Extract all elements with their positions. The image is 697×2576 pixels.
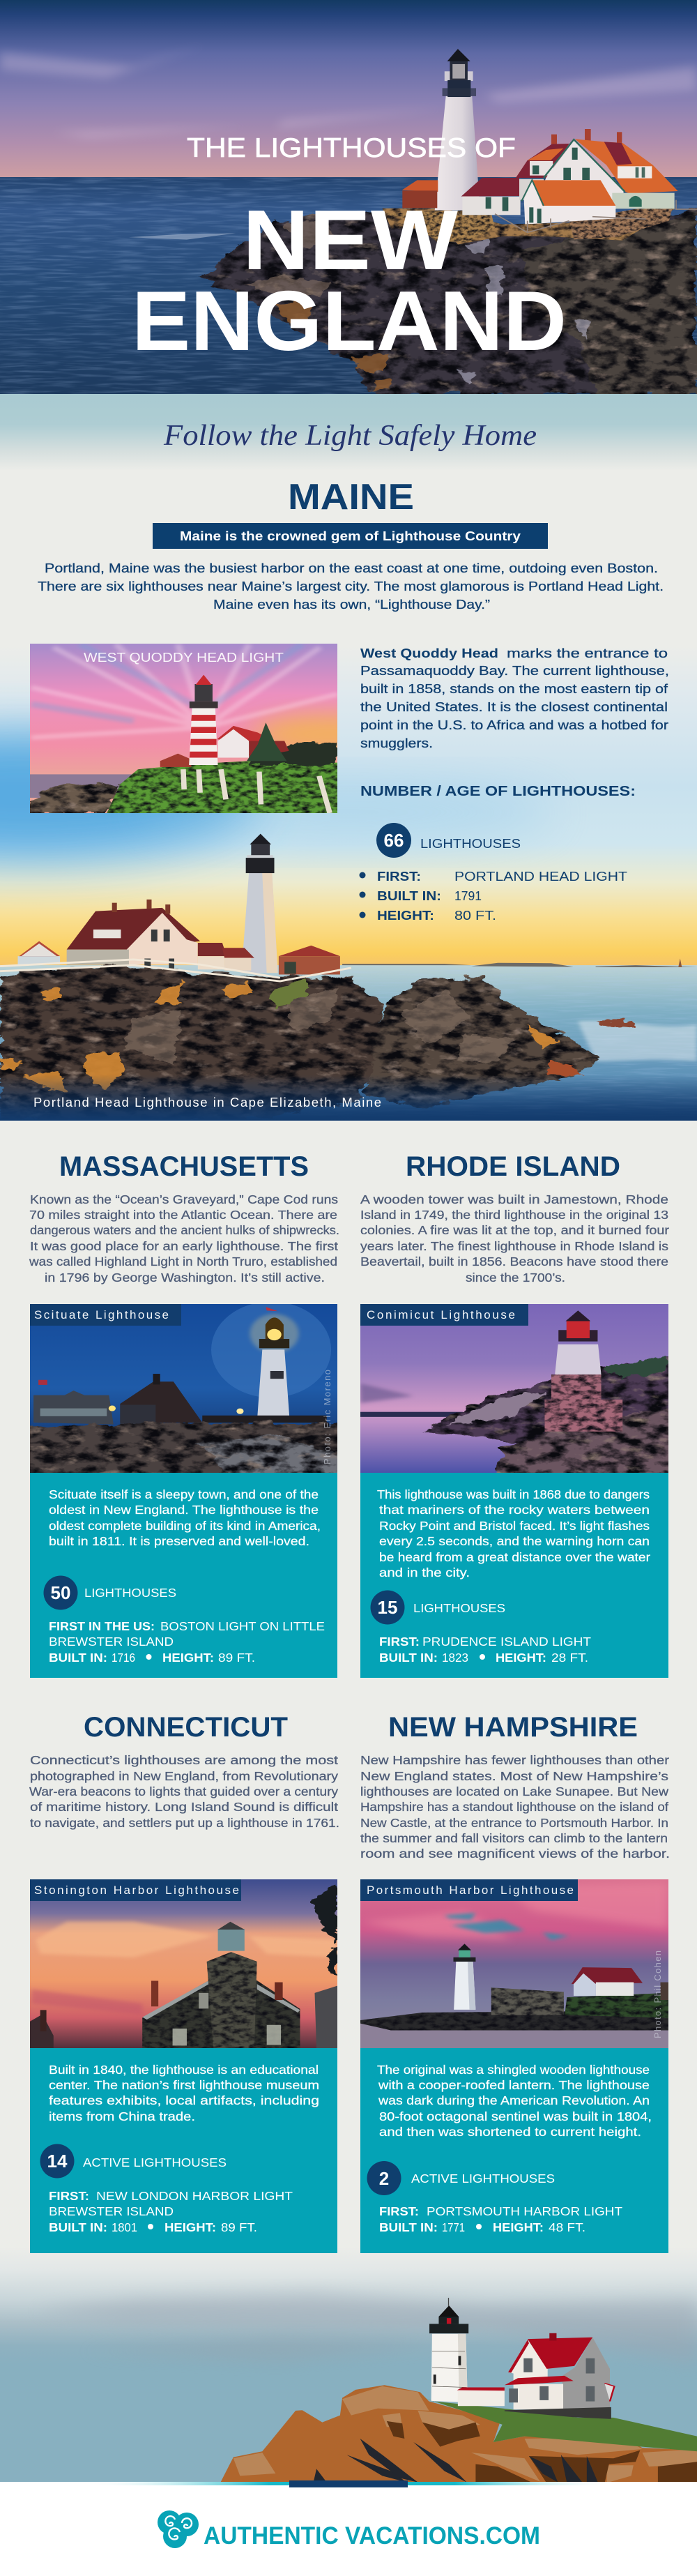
label: Portsmouth	[360, 1879, 578, 1901]
Massachusetts paragraph: It was good place for an early lighthouse. The first	[30, 1239, 338, 1253]
Conimicut facts: BUILT IN:	[379, 1651, 438, 1665]
Portsmouth facts: BUILT IN:	[379, 2220, 438, 2234]
Scituate text: Scituate itself is a sleepy town, and one of the	[49, 1487, 319, 1501]
Scituate facts: BUILT IN:	[49, 1651, 107, 1665]
Stonington text: items from China trade.	[49, 2109, 195, 2123]
photo credit: Photo: Phil Cohen	[652, 1950, 663, 2038]
Massachusetts paragraph: was called Highland Light in North Truro, established	[29, 1255, 337, 1268]
Stonington text: features exhibits, local artifacts, including	[49, 2093, 319, 2107]
Scituate text: built in 1811. It is preserved and well-loved.	[49, 1534, 309, 1548]
West Quoddy description: the United States. It is the closest continental	[360, 700, 668, 714]
stat: 15 lighthouses: 15	[378, 1597, 397, 1618]
Stonington facts	[49, 2189, 293, 2234]
heading: Connecticut: CONNECTICUT	[84, 1712, 288, 1743]
stat: 66 lighthouses	[376, 823, 521, 858]
photo: Conimicut	[360, 1304, 668, 1473]
New Hampshire paragraph: New Castle, at the entrance to Portsmouth Harbor. In	[360, 1816, 668, 1830]
Portsmouth text: and then was shortened to current height.	[379, 2125, 641, 2139]
Stonington facts: HEIGHT:	[164, 2220, 216, 2234]
Maine intro paragraph: Portland, Maine was the busiest harbor on the east coast at one time, outdoing even Boston.	[45, 561, 658, 575]
Portland rocks	[0, 960, 636, 1121]
Portsmouth text: was dark during the American Revolution. An	[378, 2093, 650, 2107]
label: Conimicut	[360, 1304, 528, 1326]
sky gradient and Portland Head photo	[0, 645, 697, 1121]
stat: 14 active lighthouses: ACTIVE LIGHTHOUSES	[83, 2155, 227, 2169]
Conimicut facts: FIRST:	[379, 1635, 420, 1649]
Scituate facts: BOSTON LIGHT ON LITTLE	[160, 1619, 325, 1633]
card: Conimicut Lighthouse	[360, 1304, 680, 1678]
Portsmouth tower	[453, 1944, 475, 2010]
Rhode Island paragraph: A wooden tower was built in Jamestown, Rhode	[360, 1192, 668, 1206]
hero lighthouse	[435, 49, 480, 211]
Stonington facts: FIRST:	[49, 2189, 89, 2203]
Portsmouth text: The original was a shingled wooden lighthouse	[377, 2063, 650, 2077]
Maine intro paragraph: There are six lighthouses near Maine’s largest city. The most glamorous is Portland Head Light.	[38, 579, 664, 593]
Maine facts list: 1791	[454, 888, 482, 903]
section: Massachusetts	[18, 1151, 351, 1678]
New Hampshire paragraph: New Hampshire has fewer lighthouses than other	[360, 1753, 669, 1767]
striped tower	[189, 675, 218, 765]
Conimicut text: that mariners of the rocky waters between	[379, 1503, 650, 1517]
stat: 50 lighthouses: LIGHTHOUSES	[84, 1586, 176, 1600]
West Quoddy description: Passamaquoddy Bay. The current lighthouse,	[360, 664, 669, 678]
fort	[491, 1987, 564, 2015]
New Hampshire paragraph: room and see magnificent views of the harbor.	[360, 1847, 670, 1861]
connector building	[457, 2388, 505, 2406]
West Quoddy description: West Quoddy Head	[360, 646, 498, 660]
card: Stonington Harbor Lighthouse	[30, 1879, 337, 2253]
West Quoddy description: marks the entrance to	[507, 646, 668, 660]
Stonington text: center. The nation’s first lighthouse museum	[49, 2078, 319, 2092]
Conimicut facts: 28 FT.	[551, 1651, 588, 1665]
Conimicut text: This lighthouse was built in 1868 due to dangers	[377, 1487, 650, 1501]
Maine facts list: FIRST:	[377, 869, 421, 884]
heading: Maine: MAINE	[288, 477, 414, 517]
section: New Hampshire	[351, 1712, 680, 2253]
hero title: ENGLAND	[132, 273, 567, 368]
stat: 66 lighthouses: 66	[384, 830, 404, 851]
stat: 50 lighthouses	[43, 1576, 176, 1609]
photo: Portsmouth	[360, 1879, 668, 2048]
stat: 14 active lighthouses: 14	[47, 2151, 68, 2172]
Conimicut text	[377, 1487, 650, 1579]
label: Scituate: Scituate Lighthouse	[34, 1308, 169, 1321]
Massachusetts paragraph: dangerous waters and the ancient hulks of shipwrecks.	[30, 1223, 339, 1237]
label: Conimicut: Conimicut Lighthouse	[367, 1308, 515, 1321]
tagline band	[0, 394, 697, 471]
stat: 15 lighthouses	[371, 1590, 505, 1625]
Connecticut paragraph: of maritime history. Long Island Sound is difficult	[30, 1800, 338, 1814]
heading: Massachusetts: MASSACHUSETTS	[59, 1151, 309, 1182]
hero subtitle: THE LIGHTHOUSES OF	[187, 133, 516, 163]
Conimicut text: Rocky Point and Bristol faced. It’s light flashes	[379, 1519, 650, 1533]
Portsmouth house	[572, 1967, 643, 1996]
label: Stonington	[30, 1879, 241, 1901]
Stonington facts: BUILT IN:	[49, 2220, 107, 2234]
card: Scituate Lighthouse	[18, 1301, 351, 1678]
rocky headland	[220, 2385, 697, 2483]
West Quoddy description: smugglers.	[360, 736, 433, 750]
Portsmouth facts: 1771	[442, 2220, 465, 2234]
Rhode Island paragraph: Island in 1749, the third lighthouse in the original 13	[360, 1208, 668, 1222]
photo: Scituate	[30, 1304, 337, 1473]
tagline band: Follow the Light Safely Home	[163, 420, 537, 452]
Rhode Island paragraph	[360, 1192, 669, 1285]
New Hampshire paragraph: lighthouses are located on Lake Sunapee. But New	[360, 1785, 668, 1798]
red-roofed house	[505, 2333, 614, 2419]
Maine intro paragraph: Maine even has its own, “Lighthouse Day.”	[213, 598, 490, 612]
Portsmouth facts: 48 FT.	[549, 2220, 585, 2234]
New Hampshire paragraph: New England states. Most of New Hampshire’s	[360, 1769, 668, 1783]
hero panel: Portland Head Light photo with title	[0, 0, 697, 395]
stat: 66 lighthouses: LIGHTHOUSES	[420, 837, 521, 851]
West Quoddy description: point in the U.S. to Africa and was a hotbed for	[360, 718, 668, 732]
logo wordmark: AUTHENTIC VACATIONS.COM	[204, 2522, 540, 2550]
Rhode Island paragraph: colonies. A fire was lit at the top, and it burned four	[360, 1223, 669, 1237]
heading: New Hampshire: NEW HAMPSHIRE	[388, 1712, 638, 1743]
Scituate text: oldest complete building of its kind in America,	[49, 1519, 321, 1533]
section: Rhode Island	[360, 1151, 680, 1678]
Maine facts list: 80 FT.	[454, 908, 496, 923]
heading: Rhode Island: RHODE ISLAND	[406, 1151, 620, 1182]
Stonington facts: 1801	[112, 2220, 137, 2234]
Maine facts list: HEIGHT:	[377, 908, 434, 923]
Scituate facts	[49, 1619, 325, 1665]
footer panel	[0, 2480, 697, 2576]
Maine intro paragraph	[38, 561, 664, 612]
label: Portsmouth: Portsmouth Harbor Lighthouse	[367, 1884, 574, 1897]
Massachusetts paragraph: Known as the “Ocean’s Graveyard,” Cape Cod runs	[30, 1192, 338, 1206]
Portsmouth facts: FIRST:	[379, 2204, 419, 2218]
icon: swirl logo	[158, 2510, 199, 2548]
label: Stonington: Stonington Harbor Lighthouse	[34, 1884, 239, 1897]
Connecticut paragraph: Connecticut’s lighthouses are among the most	[30, 1753, 338, 1767]
stat: 2 active lighthouses: 2	[379, 2168, 389, 2189]
stat: 15 lighthouses: LIGHTHOUSES	[413, 1601, 505, 1615]
Stonington text: Built in 1840, the lighthouse is an educational	[49, 2063, 319, 2077]
footer accent bar	[289, 2480, 408, 2487]
Rhode Island paragraph: years later. The finest lighthouse in Rhode Island is	[360, 1239, 668, 1253]
grass	[420, 2397, 697, 2451]
Portsmouth text	[377, 2063, 652, 2139]
section: Connecticut	[29, 1712, 339, 2253]
stat: 50 lighthouses: 50	[51, 1582, 70, 1603]
Connecticut paragraph	[29, 1753, 339, 1830]
stat: 2 active lighthouses: ACTIVE LIGHTHOUSES	[411, 2172, 555, 2185]
Scituate text: oldest in New England. The lighthouse is the	[49, 1503, 319, 1517]
Stonington text	[49, 2063, 319, 2123]
banner: Maine subtitle	[153, 523, 548, 549]
hero keeper's house	[383, 129, 697, 242]
label: Scituate	[30, 1304, 181, 1326]
Scituate facts: FIRST IN THE US:	[49, 1619, 155, 1633]
Connecticut paragraph: War-era beacons to lights that guided over a century	[29, 1785, 338, 1798]
New Hampshire paragraph	[360, 1753, 670, 1861]
Scituate facts: 89 FT.	[218, 1651, 255, 1665]
hero title	[132, 192, 567, 368]
stat: 2 active lighthouses	[367, 2161, 555, 2195]
Scituate facts: BREWSTER ISLAND	[49, 1635, 174, 1649]
New Hampshire paragraph: the summer and fall visitors can climb to the lantern	[360, 1831, 668, 1845]
Maine facts list: PORTLAND HEAD LIGHT	[454, 869, 627, 884]
Connecticut paragraph: to navigate, and settlers put up a lighthouse in 1761.	[30, 1816, 339, 1830]
Portsmouth text: with a cooper-roofed lantern. The lighthouse	[378, 2078, 650, 2092]
Conimicut text: be heard from a great distance over the water	[379, 1550, 650, 1564]
Portland keeper's house	[18, 900, 254, 971]
banner: Maine subtitle: Maine is the crowned gem of Lighthouse Country	[180, 529, 521, 543]
Rhode Island paragraph: since the 1700’s.	[466, 1271, 565, 1285]
Stonington facts: 89 FT.	[221, 2220, 257, 2234]
photo caption: Portland Head: Portland Head Lighthouse in Cape Elizabeth, Maine	[33, 1095, 381, 1109]
keeper's house	[217, 722, 289, 761]
Rhode Island paragraph: Beavertail, built in 1856. Beacons have stood there	[360, 1255, 668, 1268]
hero title: NEW	[243, 192, 459, 287]
Portsmouth facts: PORTSMOUTH HARBOR LIGHT	[427, 2204, 622, 2218]
Stonington facts: BREWSTER ISLAND	[49, 2204, 174, 2218]
heading: number and age of lighthouses: NUMBER / AGE OF LIGHTHOUSES:	[360, 784, 636, 799]
Scituate text	[49, 1487, 321, 1548]
Scituate facts: HEIGHT:	[162, 1651, 214, 1665]
Portsmouth facts: HEIGHT:	[493, 2220, 544, 2234]
Massachusetts paragraph: in 1796 by George Washington. It’s still active.	[45, 1271, 325, 1285]
photo: Stonington	[30, 1879, 337, 2048]
Stonington facts: NEW LONDON HARBOR LIGHT	[96, 2189, 293, 2203]
card: Portsmouth Harbor Lighthouse	[351, 1879, 680, 2253]
Massachusetts paragraph: 70 miles straight into the Atlantic Ocean. There are	[29, 1208, 337, 1222]
bottom sky illustration	[0, 2247, 697, 2483]
white lighthouse	[429, 2298, 468, 2402]
Conimicut tower	[544, 1310, 622, 1432]
Conimicut facts: PRUDENCE ISLAND LIGHT	[422, 1635, 591, 1649]
West Quoddy description: built in 1858, stands on the most eastern tip of	[360, 682, 668, 696]
Massachusetts paragraph	[29, 1192, 339, 1285]
Portland brick building	[279, 946, 340, 974]
photo credit: Photo: Eric Moreno	[322, 1370, 332, 1464]
West Quoddy description	[360, 646, 669, 750]
Maine facts list	[360, 869, 627, 923]
Connecticut paragraph: photographed in New England, from Revolutionary	[30, 1769, 338, 1783]
Scituate facts: 1716	[112, 1651, 135, 1665]
Conimicut facts	[379, 1635, 591, 1665]
New Hampshire paragraph: Hampshire has a standout lighthouse on the island of	[360, 1800, 668, 1814]
Conimicut facts: 1823	[442, 1651, 468, 1665]
Portsmouth facts	[379, 2204, 622, 2234]
Conimicut facts: HEIGHT:	[496, 1651, 546, 1665]
Conimicut text: every 2.5 seconds, and the warning horn can	[379, 1534, 650, 1548]
Maine facts list: BUILT IN:	[377, 888, 441, 903]
photo: West Quoddy Head Light: WEST QUODDY HEAD LIGHT	[84, 651, 284, 665]
Conimicut text: and in the city.	[379, 1566, 470, 1579]
Portsmouth text: 80-foot octagonal sentinel was built in 1804,	[379, 2109, 652, 2123]
stone lighthouse	[142, 1922, 300, 2048]
stat: 14 active lighthouses	[40, 2144, 227, 2179]
photo: West Quoddy Head Light	[30, 644, 404, 813]
Portland lighthouse tower	[241, 834, 278, 973]
